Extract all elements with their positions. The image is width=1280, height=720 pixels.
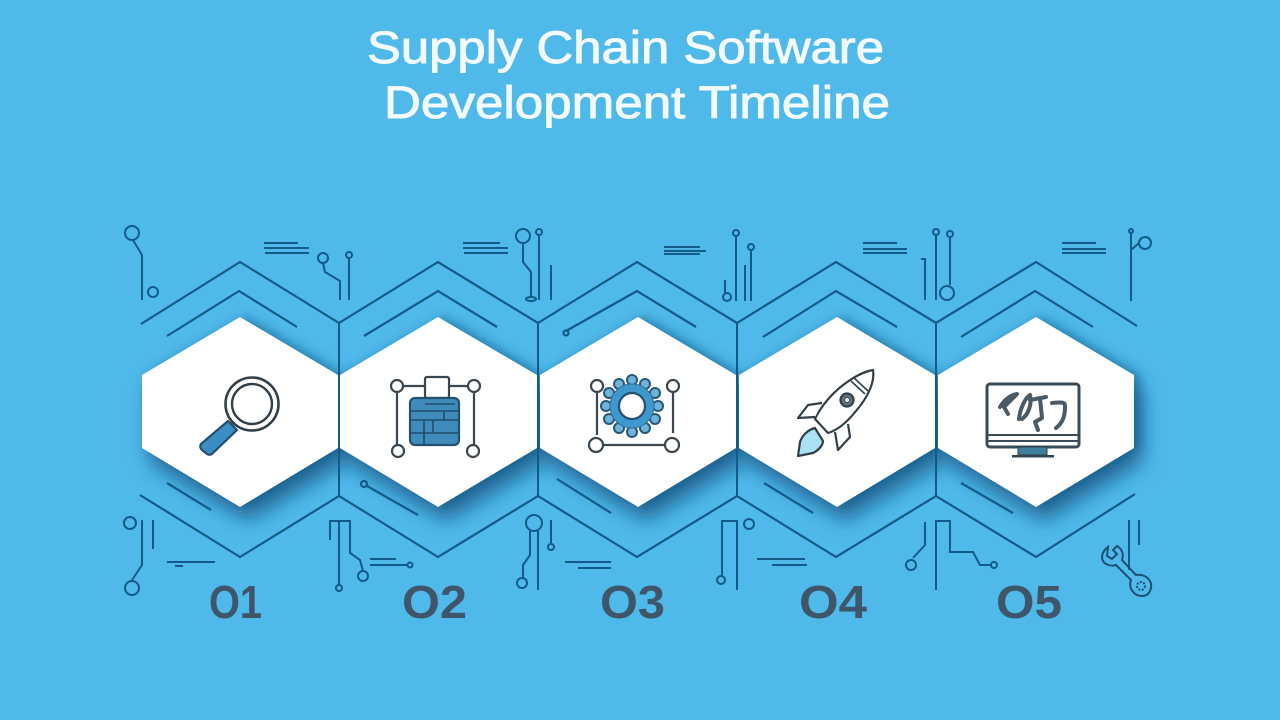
icon: software blueprint block bbox=[391, 377, 480, 457]
circuit traces: top bbox=[125, 226, 1151, 301]
step numbers: O1 bbox=[209, 576, 262, 628]
hexagon shadows bbox=[150, 331, 1142, 521]
hexagon: step 4 bbox=[739, 317, 935, 507]
hexagon: step 3 bbox=[540, 317, 736, 507]
icon: gear bbox=[589, 375, 679, 452]
icon: magnifying glass bbox=[200, 378, 278, 455]
hexagon: step 5 bbox=[938, 317, 1134, 507]
title: Development Timeline bbox=[384, 77, 890, 128]
icon: monitor bbox=[987, 384, 1079, 458]
vertical dividers bbox=[339, 323, 936, 496]
title: Supply Chain Software bbox=[367, 22, 884, 73]
title bbox=[367, 22, 890, 128]
hexagon: step 1 bbox=[142, 317, 338, 507]
circuit traces: bottom bbox=[124, 515, 1139, 595]
step numbers: O2 bbox=[402, 576, 467, 628]
icon: rocket bbox=[798, 370, 873, 456]
icon: wrench bbox=[1102, 546, 1151, 596]
step numbers: O5 bbox=[996, 576, 1062, 628]
step numbers bbox=[209, 576, 1062, 628]
step numbers: O4 bbox=[799, 576, 867, 628]
hexagon: step 2 bbox=[340, 317, 537, 507]
zigzag frame lines bbox=[140, 262, 1137, 557]
step numbers: O3 bbox=[600, 576, 665, 628]
upper edge shading bbox=[148, 316, 1140, 506]
